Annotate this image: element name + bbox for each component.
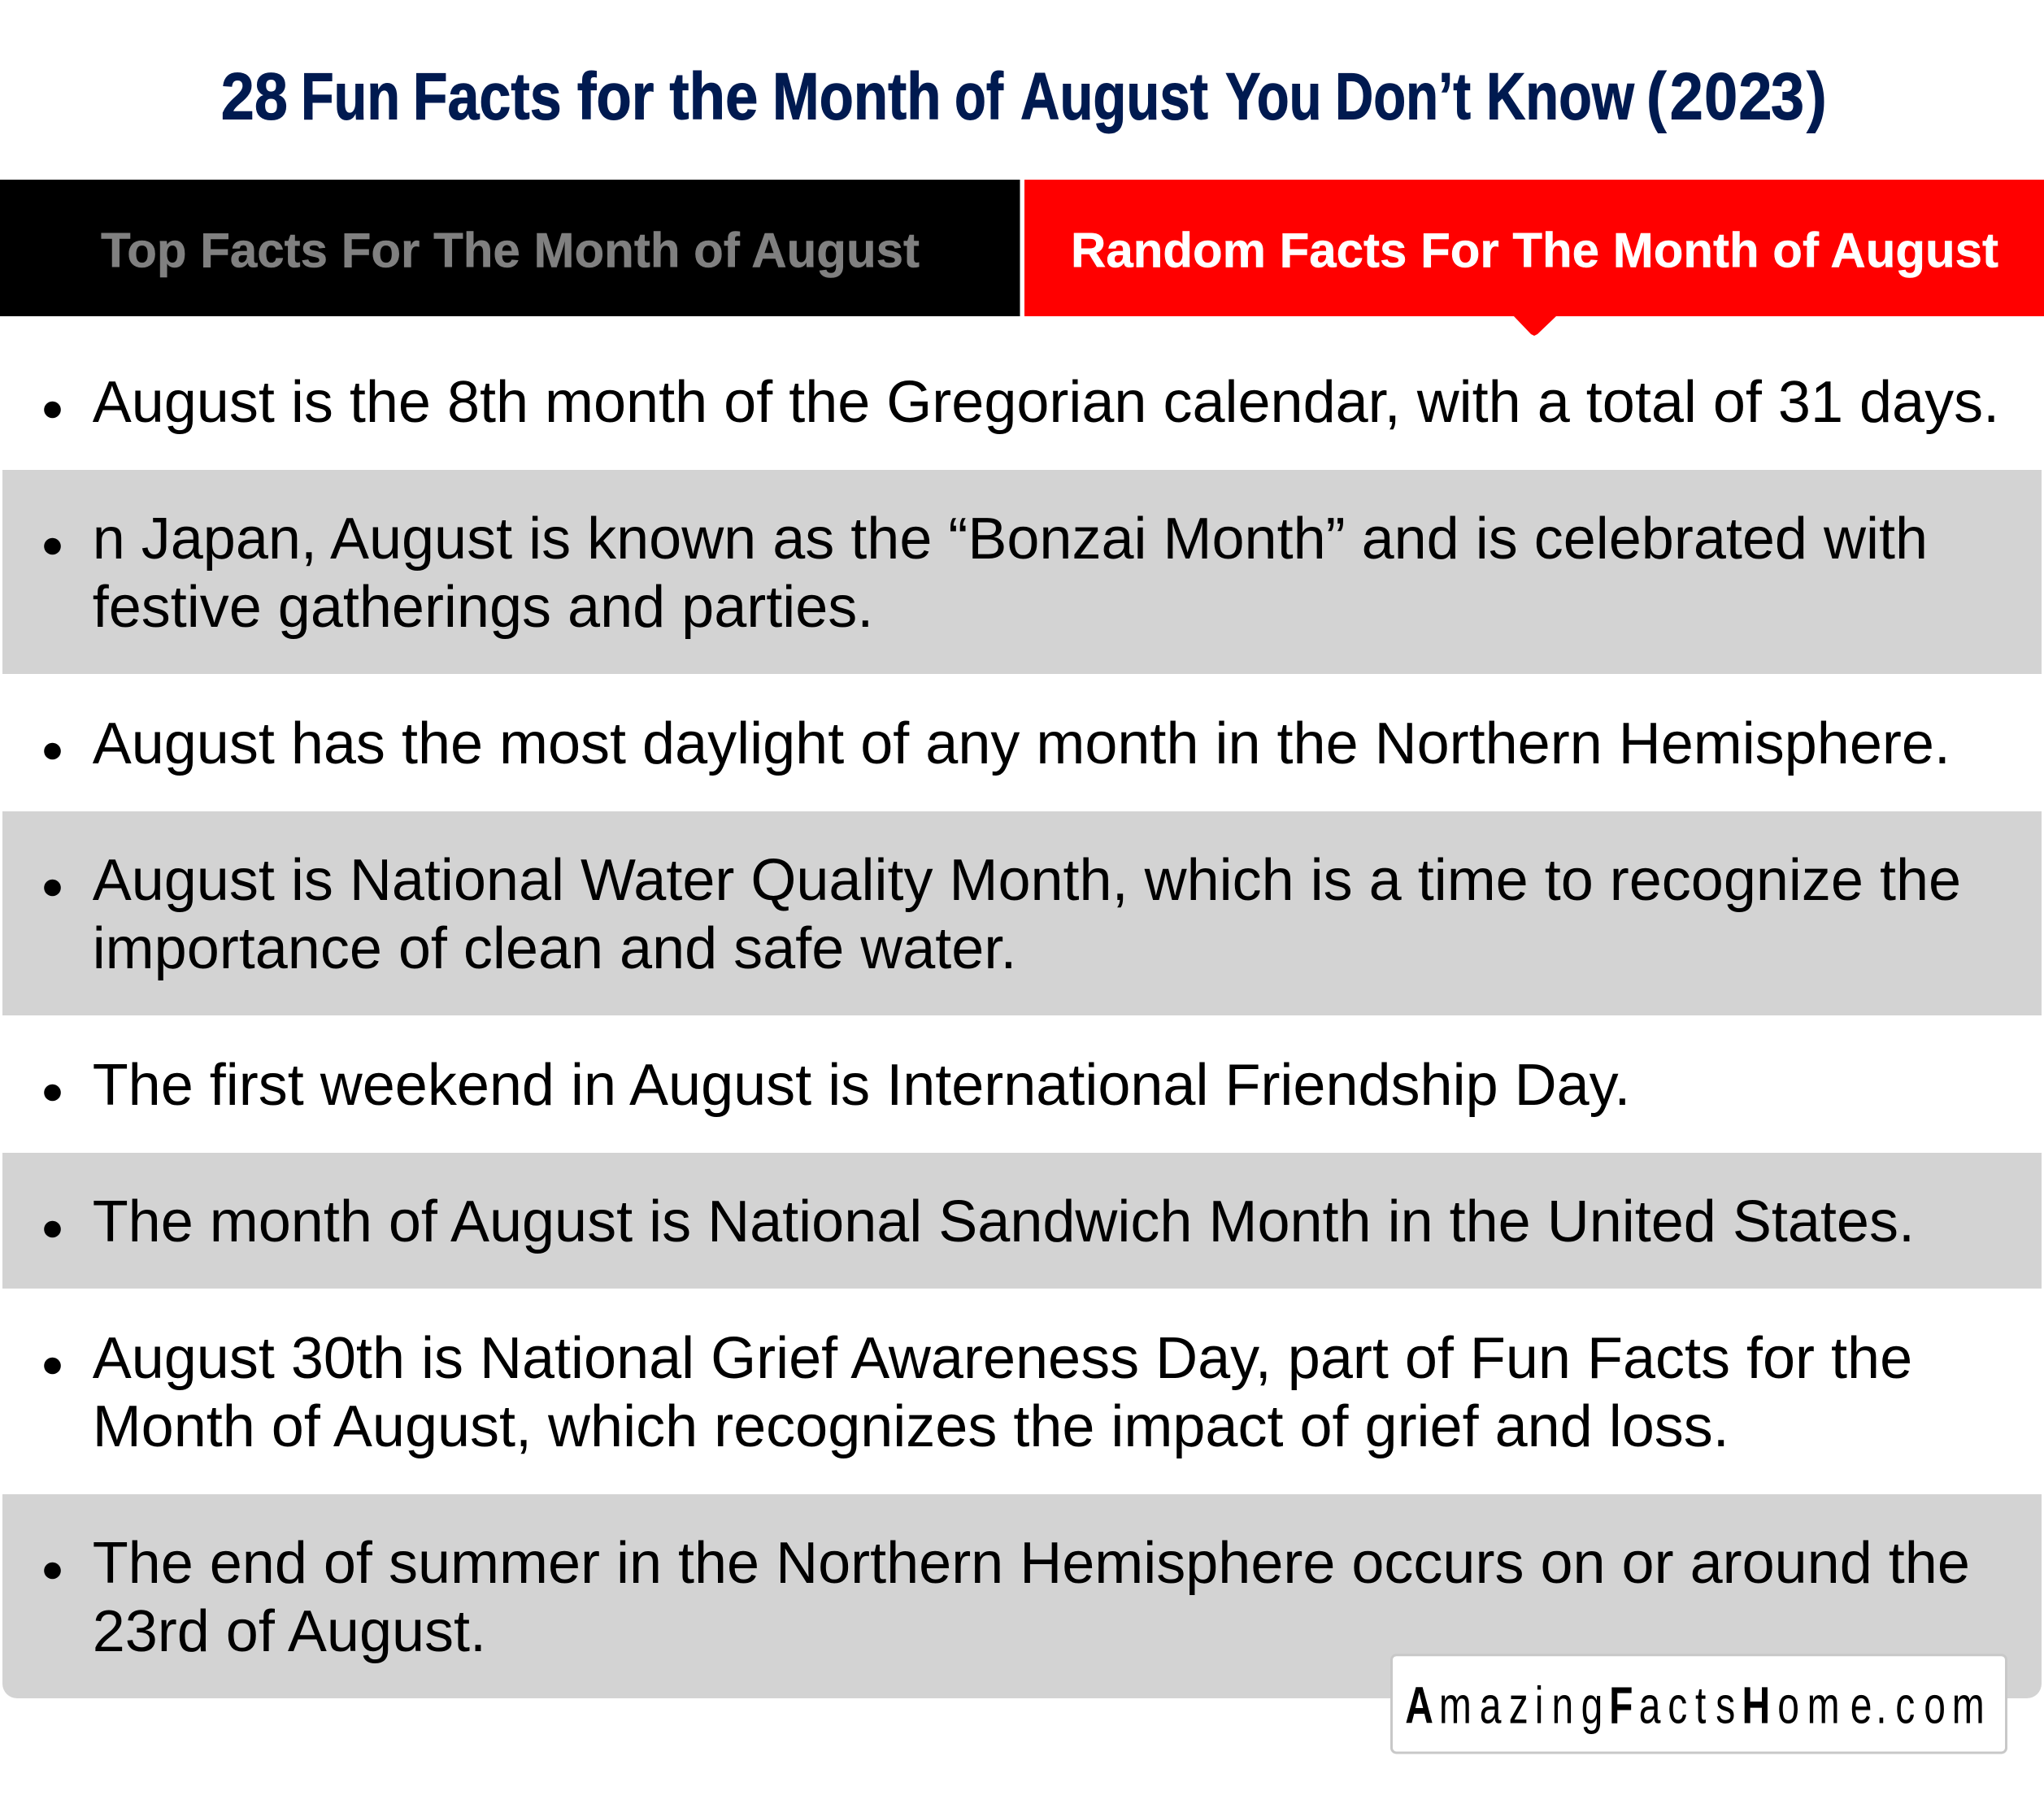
tab: top facts: Top Facts For The Month of August [101, 223, 920, 278]
title [221, 59, 1827, 133]
fact 4 [2, 811, 2042, 1015]
fact 7 [44, 1326, 1912, 1459]
fact 4: importance of clean and safe water. [93, 916, 1016, 981]
title: Facts [413, 60, 562, 133]
fact 6: The month of August is National Sandwich Month in the United States. [93, 1189, 1915, 1254]
tab: random facts: Random Facts For The Month of August [1071, 223, 1998, 278]
title: 28 [221, 59, 288, 133]
title: the [669, 60, 758, 133]
tab: top facts [0, 180, 1020, 316]
watermark badge: ome.com [1777, 1676, 1985, 1734]
watermark badge [1392, 1655, 2007, 1753]
fact 8: 23rd of August. [93, 1599, 486, 1664]
title: You [1225, 60, 1322, 133]
fact 7: August 30th is National Grief Awareness Day, part of Fun Facts for the [93, 1326, 1912, 1391]
title: Month [772, 60, 942, 133]
fact 8: The end of summer in the Northern Hemisphere occurs on or around the [93, 1531, 1970, 1596]
fact 6 [2, 1153, 2042, 1289]
title: Don’t [1335, 60, 1471, 133]
watermark badge: mazing [1439, 1676, 1603, 1734]
title: for [577, 60, 654, 133]
title: (2023) [1646, 59, 1827, 133]
watermark badge: A [1405, 1676, 1433, 1734]
tab: random facts [1024, 180, 2044, 336]
fact 7: Month of August, which recognizes the impact of grief and loss. [93, 1394, 1729, 1459]
title: August [1020, 60, 1208, 133]
title: Know [1486, 60, 1634, 133]
watermark badge: acts [1639, 1676, 1735, 1734]
fact 3: August has the most daylight of any month in the Northern Hemisphere. [93, 711, 1950, 776]
watermark badge: H [1742, 1676, 1770, 1734]
fact 1: August is the 8th month of the Gregorian calendar, with a total of 31 days. [93, 370, 1999, 435]
fact 2: festive gatherings and parties. [93, 575, 873, 640]
title: Fun [301, 60, 400, 133]
fact 5: The first weekend in August is International Friendship Day. [93, 1053, 1630, 1118]
fact 8 [2, 1494, 2042, 1698]
watermark badge: F [1609, 1676, 1633, 1734]
fact 4: August is National Water Quality Month, which is a time to recognize the [93, 848, 1961, 913]
title: of [955, 60, 1004, 133]
fact 2 [2, 470, 2042, 674]
fact 2: n Japan, August is known as the “Bonzai Month” and is celebrated with [93, 506, 1928, 572]
